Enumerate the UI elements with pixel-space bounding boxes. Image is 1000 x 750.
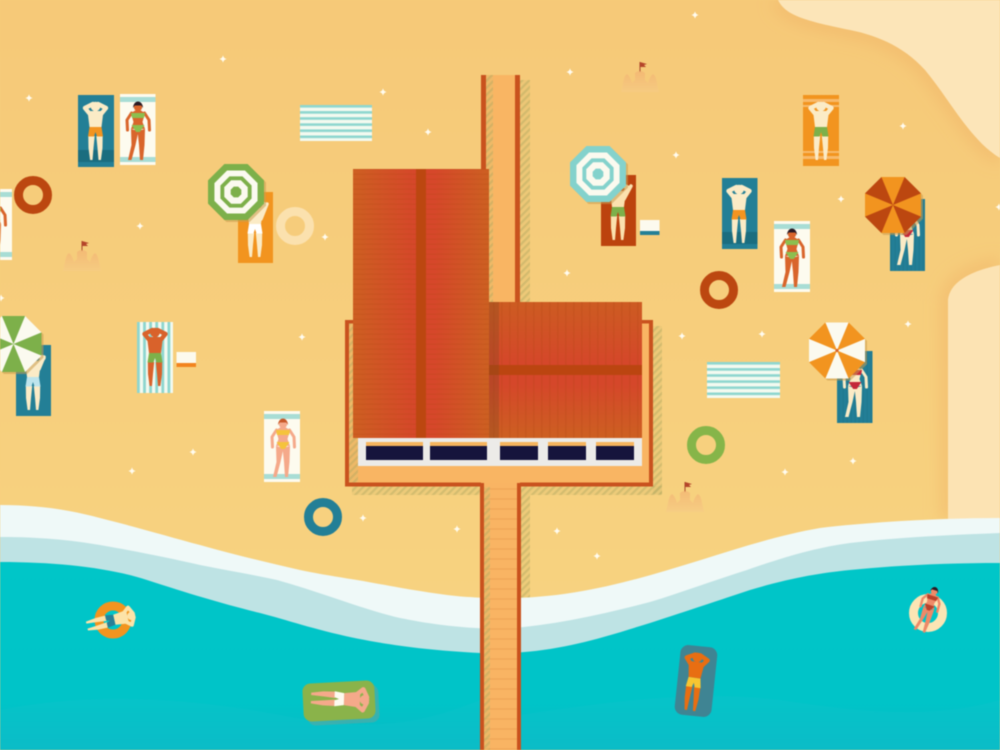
swimmer on teal mat <box>674 644 718 718</box>
sea ripples <box>0 696 1000 750</box>
cooler box: teal <box>640 220 660 235</box>
sandcastle south <box>666 482 704 512</box>
sunbather: woman on white towel east <box>774 221 810 292</box>
dry sand right <box>948 265 1000 530</box>
pier south walkway <box>480 483 521 750</box>
umbrella: green rings <box>208 164 266 222</box>
building west roof <box>353 169 489 438</box>
umbrella: teal rings <box>570 146 628 204</box>
dry sand top right <box>778 0 1000 158</box>
rings on sand <box>18 180 734 532</box>
pier: shadows hatching <box>352 80 662 495</box>
striped towel north <box>300 105 372 141</box>
sandcastle west <box>63 241 101 271</box>
sunbather: teal towel under orange umbrella <box>890 199 925 271</box>
pier north walkway <box>481 75 520 315</box>
sunbather: teal towel under white umbrella <box>837 351 872 423</box>
sea <box>0 562 1000 750</box>
building east roof <box>489 302 642 438</box>
sunbather: woman on white towel <box>120 94 156 165</box>
sunbather: man on teal towel east <box>722 178 758 249</box>
foam white band <box>0 505 1000 750</box>
deck platform <box>345 320 653 487</box>
sunbather: man on orange towel <box>803 95 839 166</box>
umbrella: orange and rust <box>865 177 923 235</box>
sunbather: woman on white towel south <box>264 411 300 482</box>
pier shadow on the sand, south <box>520 495 530 599</box>
foam teal band <box>0 533 1000 750</box>
sunbather: woman at left edge <box>0 189 12 260</box>
umbrella: green and white <box>0 316 44 374</box>
dune shadow <box>778 0 1000 520</box>
stars on the sand <box>0 11 1000 560</box>
sunbather: red towel under teal umbrella <box>601 175 636 246</box>
sunbather: man on striped towel <box>137 322 173 393</box>
swimmer on orange ring <box>85 606 137 635</box>
building windows strip <box>358 438 642 466</box>
cooler box: orange <box>176 352 196 367</box>
sunbather: man on teal towel <box>78 95 114 167</box>
sunbather: teal towel under green umbrella <box>16 345 51 416</box>
sunbather: orange towel under green umbrella <box>238 192 273 263</box>
sandcastle north <box>621 62 659 92</box>
swimmer on green mat <box>302 680 380 726</box>
swimmer on cream ring <box>913 584 944 634</box>
umbrella: orange and white <box>809 322 867 380</box>
striped towel east <box>707 362 780 398</box>
